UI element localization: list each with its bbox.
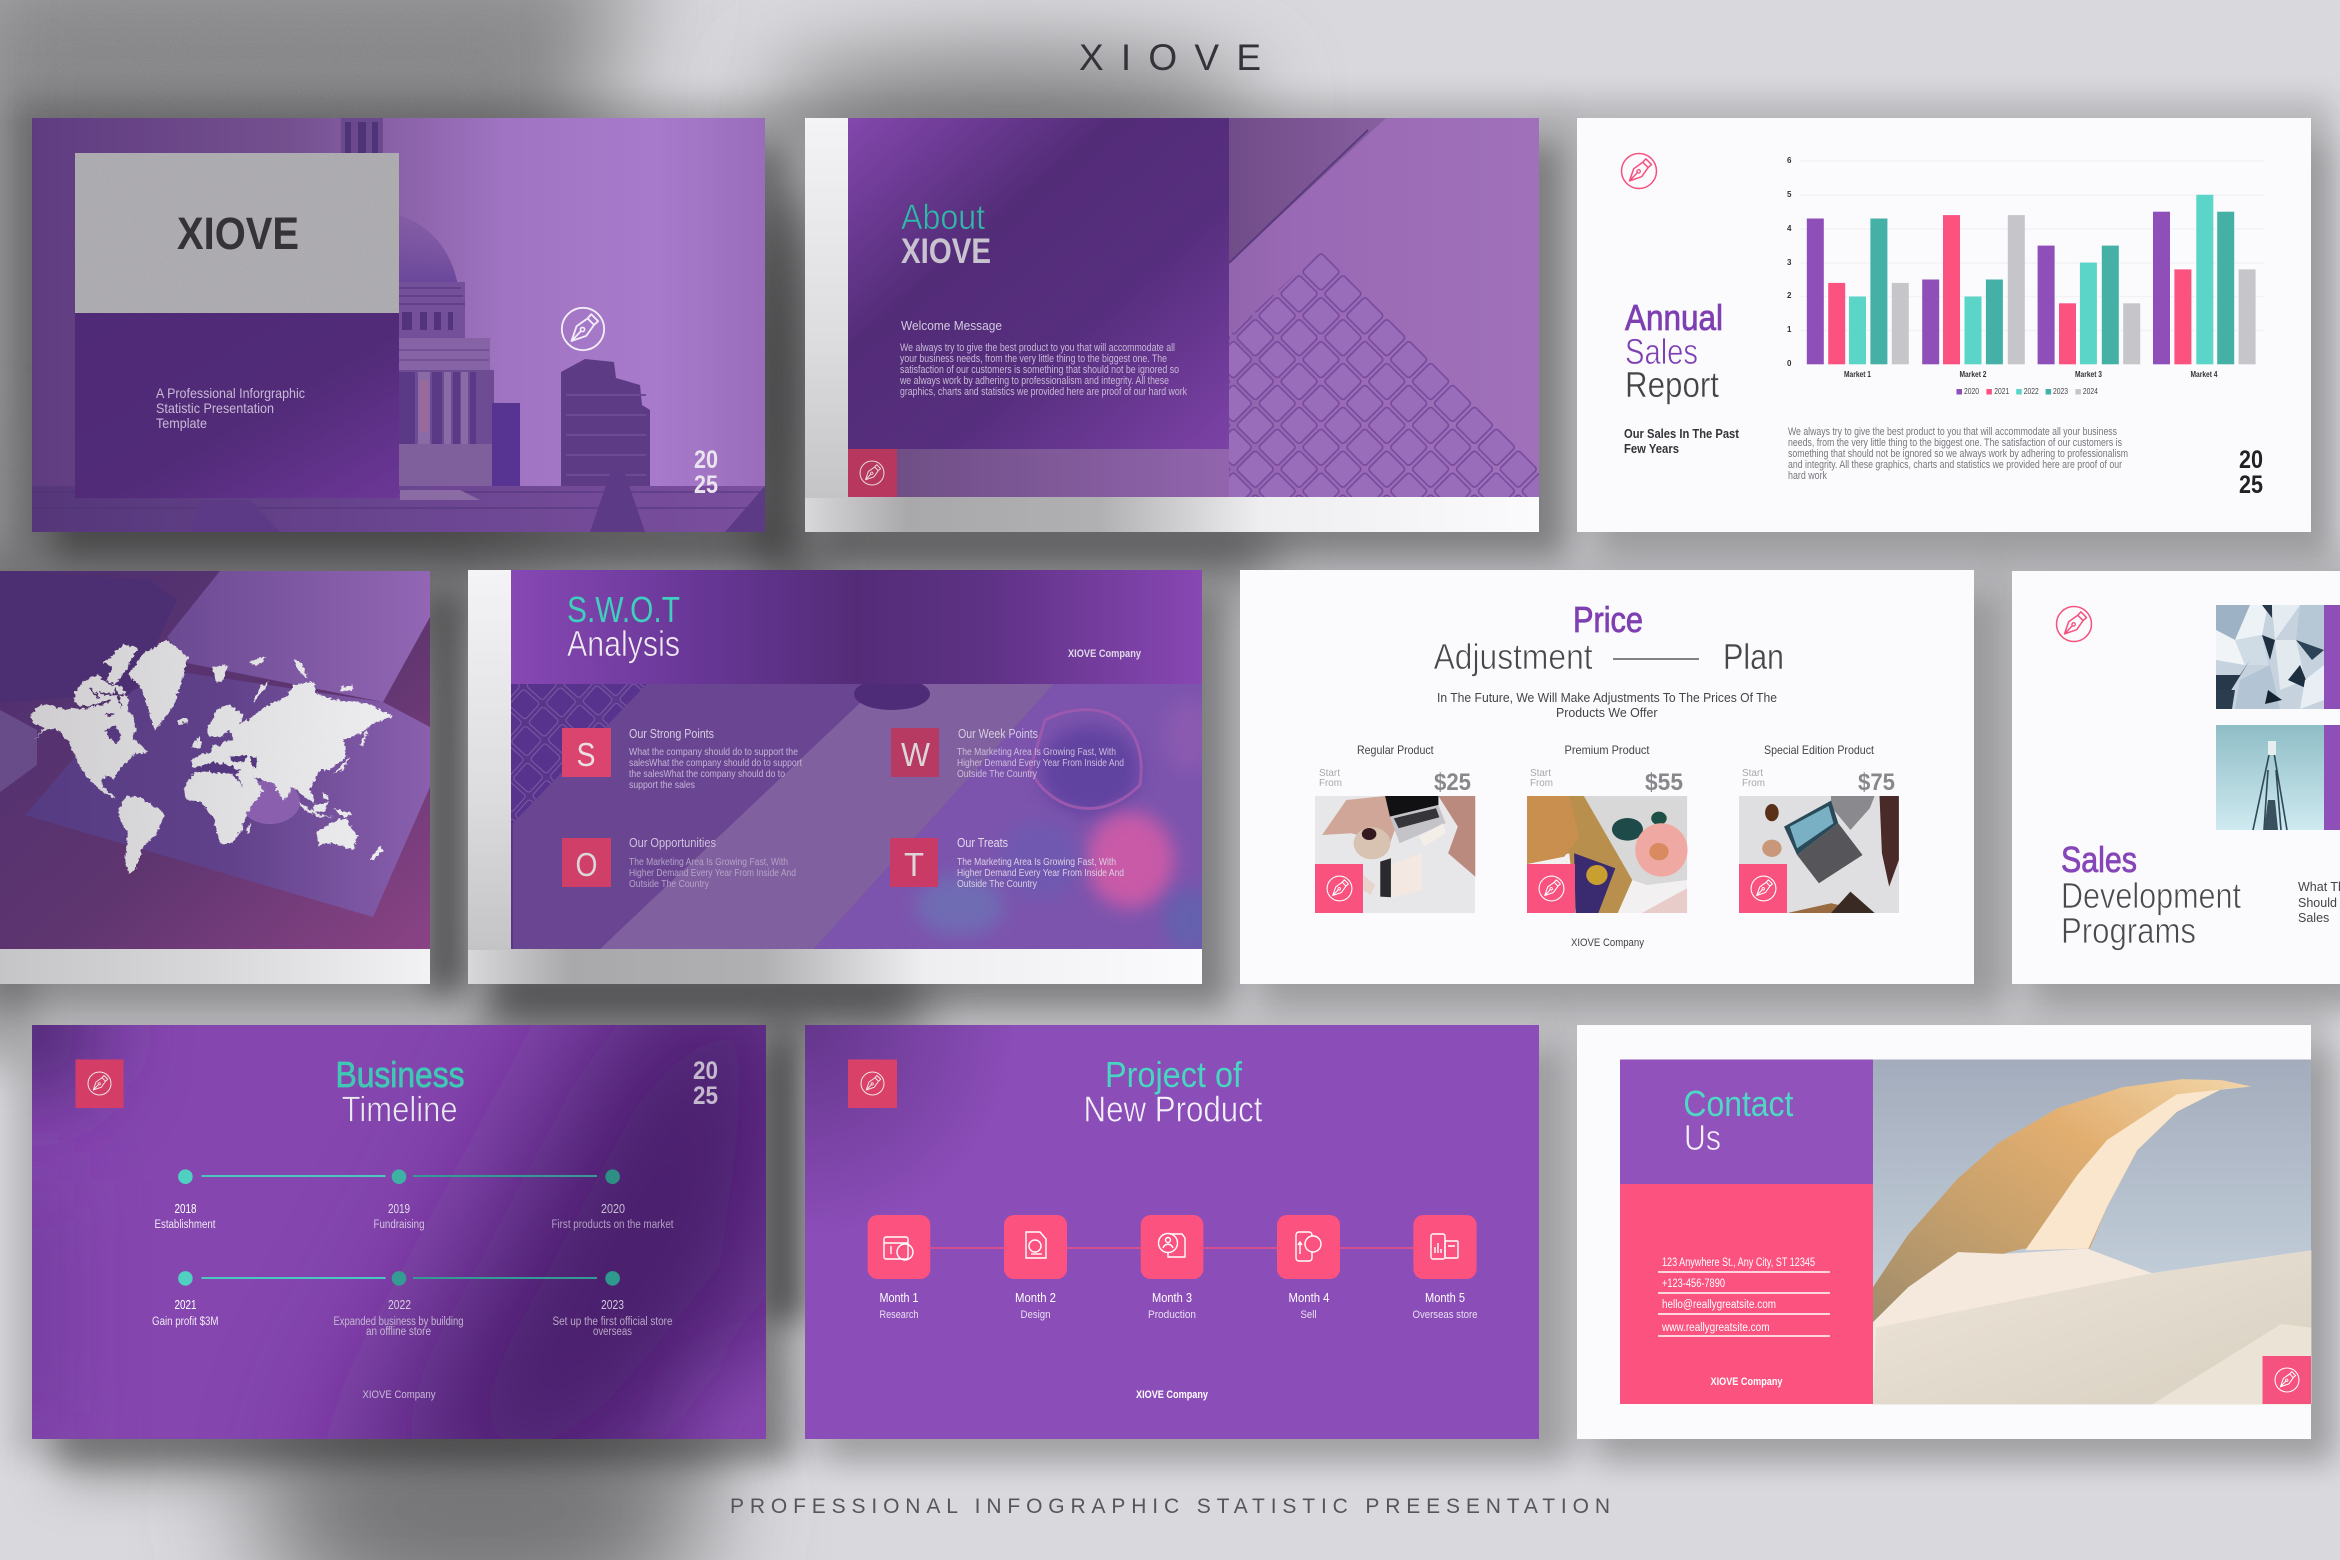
swot item: opportunities: Our Opportunities — [629, 836, 716, 850]
heading — [1625, 297, 1723, 405]
step: month 5: Overseas store — [1412, 1309, 1478, 1321]
heading: Plan — [1723, 636, 1784, 677]
timeline row two: 2022 — [388, 1297, 411, 1312]
body text: something that should not be ignored so we always work by adhering to professionalism — [1788, 448, 2128, 460]
pink contact block: 123 Anywhere St., Any City, ST 12345 — [1662, 1257, 1815, 1269]
subheading: Our Sales In The Past — [1624, 426, 1740, 441]
timeline row two: 2023 — [601, 1297, 624, 1312]
purple subtitle box: Statistic Presentation — [156, 400, 274, 416]
timeline row one: Establishment — [154, 1219, 216, 1231]
year: 20 — [694, 446, 718, 474]
bar chart: 5 — [1787, 190, 1792, 199]
step: month 4: Sell — [1300, 1309, 1316, 1321]
swot item: weaknesses: Our Week Points — [958, 727, 1038, 741]
panel: price plan slide — [1240, 570, 1974, 984]
body text: needs, from the very little thing to the biggest one. The satisfaction of our customers is — [1788, 437, 2122, 449]
pink contact block — [1620, 1184, 1873, 1404]
dark text panel: Welcome Message — [901, 318, 1002, 333]
swot item: threats: The Marketing Area Is Growing Fast, With — [957, 856, 1116, 868]
step: month 5 — [1412, 1215, 1478, 1321]
heading — [1434, 599, 1784, 677]
body text: hard work — [1788, 470, 1827, 482]
panel: cover slide — [32, 118, 765, 532]
pink contact block: hello@reallygreatsite.com — [1662, 1299, 1776, 1311]
timeline row one: 2018 — [174, 1201, 196, 1216]
step: month 4: Month 4 — [1288, 1290, 1330, 1305]
title: XIOVE — [1079, 37, 1261, 78]
timeline row two: 2021 — [174, 1297, 196, 1312]
product: premium — [1527, 743, 1688, 913]
product: special edition — [1739, 743, 1899, 913]
pink contact block: XIOVE Company — [1710, 1376, 1783, 1388]
panel: about slide — [805, 118, 1539, 532]
swot item: threats — [890, 836, 1124, 890]
panel: sales development slide — [2012, 571, 2340, 984]
swot item: strengths: the salesWhat the company should do to — [629, 768, 785, 780]
heading: Development — [2061, 875, 2241, 916]
pink contact block: www.reallygreatsite.com — [1661, 1322, 1770, 1334]
purple tile — [2324, 605, 2340, 709]
product: special edition: From — [1742, 778, 1765, 789]
heading: Project of — [1105, 1054, 1243, 1095]
icon: pink logo tile — [2262, 1356, 2311, 1404]
panel: world map slide — [0, 571, 430, 984]
panel: SWOT slide — [468, 570, 1216, 984]
world map — [32, 640, 393, 874]
heading: Annual — [1625, 297, 1723, 338]
product: premium: $55 — [1645, 769, 1683, 796]
swot item: strengths: support the sales — [629, 779, 695, 791]
year: 25 — [694, 471, 718, 499]
heading — [1084, 1054, 1262, 1130]
icon: pen nib — [562, 308, 604, 350]
product: regular — [1315, 743, 1475, 913]
timeline row two: Gain profit $3M — [152, 1316, 218, 1328]
icon: pen logo — [2057, 607, 2091, 641]
step: month 2: Month 2 — [1015, 1290, 1056, 1305]
step: month 3: Month 3 — [1152, 1290, 1192, 1305]
heading — [2061, 839, 2241, 951]
purple subtitle box: Template — [156, 415, 207, 431]
footer label: XIOVE Company — [362, 1389, 436, 1401]
product: special edition: Start — [1742, 768, 1763, 779]
subheading cut off at edge — [2298, 880, 2340, 925]
timeline row two: Set up the first official store — [552, 1316, 672, 1328]
header band: S.W.O.T — [567, 589, 680, 630]
step: month 2: Design — [1020, 1309, 1050, 1321]
year: 20 — [2239, 446, 2263, 474]
product: regular: From — [1319, 778, 1342, 789]
swot item: strengths: Our Strong Points — [629, 727, 714, 741]
swot item: threats: Outside The Country — [957, 878, 1038, 890]
swot item: weaknesses: Outside The Country — [957, 768, 1038, 780]
timeline row one: Fundraising — [374, 1219, 424, 1231]
swot item: threats: Higher Demand Every Year From Inside And — [957, 867, 1124, 879]
photo: keyboard — [1229, 118, 1539, 497]
heading: Report — [1625, 364, 1719, 405]
dark text panel: XIOVE — [901, 232, 991, 271]
grey title box: XIOVE — [177, 208, 299, 259]
heading: Timeline — [342, 1089, 458, 1130]
swot item: opportunities: Outside The Country — [629, 878, 710, 890]
dark text panel: About — [901, 198, 985, 237]
heading: Sales — [1625, 331, 1698, 372]
step: month 1: Research — [880, 1309, 918, 1321]
year: 25 — [2239, 471, 2263, 499]
swot item: strengths: salesWhat the company should do to support — [629, 757, 802, 769]
bar chart: 1 — [1787, 325, 1792, 334]
swot item: opportunities: Higher Demand Every Year From Inside And — [629, 867, 796, 879]
year — [693, 1057, 718, 1110]
year: 25 — [693, 1082, 718, 1110]
heading: Programs — [2061, 910, 2196, 951]
icon: red logo tile — [76, 1060, 124, 1108]
heading: New Product — [1084, 1089, 1262, 1130]
subheading — [1437, 690, 1777, 720]
year — [2239, 446, 2263, 499]
connector lines — [930, 1247, 1414, 1249]
year — [694, 446, 718, 499]
photo: spire — [2216, 725, 2324, 830]
timeline row two — [152, 1271, 672, 1338]
step: month 3: Production — [1148, 1309, 1196, 1321]
heading — [336, 1054, 464, 1130]
bar chart: Market 1 — [1844, 370, 1871, 379]
legend — [1956, 387, 2098, 396]
header band: XIOVE Company — [1068, 648, 1142, 660]
heading: Adjustment — [1434, 636, 1593, 677]
heading: Business — [336, 1054, 464, 1095]
product: regular: $25 — [1434, 769, 1471, 796]
subheading: Few Years — [1624, 441, 1679, 456]
swot item: weaknesses: Higher Demand Every Year From Inside And — [957, 757, 1124, 769]
bar chart: 3 — [1787, 258, 1792, 267]
grey title box — [75, 153, 399, 313]
dark text panel: We always try to give the best product to you that will accommodate all — [900, 342, 1175, 354]
body text — [1788, 426, 2128, 482]
purple heading block: Contact — [1683, 1083, 1793, 1124]
bar chart — [1787, 156, 2264, 396]
subheading — [1624, 426, 1740, 456]
step: month 5: Month 5 — [1425, 1290, 1465, 1305]
purple subtitle box: A Professional Inforgraphic — [156, 385, 305, 401]
timeline row one: First products on the market — [552, 1219, 674, 1231]
product: regular: Start — [1319, 768, 1340, 779]
step: month 1: Month 1 — [880, 1290, 918, 1305]
bar chart: Market 4 — [2190, 370, 2218, 379]
step: month 2 — [1004, 1215, 1067, 1321]
timeline row two: an offline store — [366, 1326, 431, 1338]
timeline row two: Expanded business by building — [334, 1316, 464, 1328]
subheading: In The Future, We Will Make Adjustments To The Prices Of The — [1437, 690, 1777, 705]
pink contact block: +123-456-7890 — [1662, 1278, 1725, 1290]
legend: 2021 — [1994, 387, 2010, 396]
heading: Price — [1573, 599, 1643, 640]
product: premium: From — [1530, 778, 1553, 789]
timeline row one: 2019 — [388, 1201, 410, 1216]
bar chart: 4 — [1787, 224, 1792, 233]
product: premium: Premium Product — [1564, 743, 1650, 757]
panel: new product project slide — [805, 1025, 1539, 1439]
swot item: weaknesses — [891, 727, 1124, 780]
photo: city skyline with dome — [32, 118, 765, 532]
bar chart: 6 — [1787, 156, 1792, 165]
legend: 2023 — [2053, 387, 2068, 396]
swot item: weaknesses: W — [901, 736, 931, 773]
swot item: threats: Our Treats — [957, 836, 1008, 850]
purple tile — [2324, 725, 2340, 830]
body text: We always try to give the best product to you that will accommodate all your business — [1788, 426, 2117, 438]
product: special edition: Special Edition Product — [1764, 743, 1875, 757]
step: month 3 — [1141, 1215, 1203, 1321]
bar chart: 0 — [1787, 359, 1792, 368]
product: regular: Regular Product — [1357, 743, 1434, 757]
photo: white sail architecture — [1873, 1060, 2311, 1404]
bar chart: Market 3 — [2075, 370, 2102, 379]
swot item: strengths — [562, 727, 802, 791]
heading: Sales — [2061, 839, 2137, 880]
swot item: opportunities — [562, 836, 796, 890]
body text: and integrity. All these graphics, charts and statistics we provided here are proof of our — [1788, 459, 2122, 471]
product: premium: Start — [1530, 768, 1551, 779]
subheading: Products We Offer — [1556, 705, 1658, 720]
icon: red logo tile — [848, 449, 897, 497]
swot item: strengths: What the company should do to support the — [629, 746, 798, 758]
swot item: opportunities: O — [576, 846, 598, 883]
legend: 2024 — [2083, 387, 2098, 396]
legend: 2022 — [2024, 387, 2039, 396]
header band — [511, 570, 1202, 684]
bar chart: 2 — [1787, 291, 1792, 300]
legend: 2020 — [1964, 387, 1979, 396]
dark text panel: we always work by adhering to professionalism and integrity. All these — [899, 375, 1169, 387]
dark text panel: graphics, charts and statistics we provided here are proof of our hard work — [900, 386, 1187, 398]
icon: red logo tile — [848, 1060, 897, 1108]
header band: Analysis — [567, 623, 680, 664]
swot item: opportunities: The Marketing Area Is Growing Fast, With — [629, 856, 788, 868]
dark text panel: satisfaction of our customers is something that should not be ignored so — [900, 364, 1179, 376]
photo: desk sheets — [0, 571, 430, 917]
photo: geometric facade — [2216, 605, 2324, 709]
panel: annual sales report — [1577, 118, 2311, 532]
timeline row one — [154, 1169, 674, 1231]
soft gradient shading — [32, 1025, 766, 1439]
icon: pen logo — [1622, 154, 1656, 188]
dark text panel: your business needs, from the very little thing to the biggest one. The — [900, 353, 1167, 365]
swot item: weaknesses: The Marketing Area Is Growing Fast, With — [957, 746, 1116, 758]
purple heading block — [1620, 1060, 1873, 1184]
panel: contact slide — [1577, 1025, 2311, 1439]
swot item: threats: T — [904, 846, 924, 883]
swot item: strengths: S — [576, 736, 596, 773]
product: special edition: $75 — [1858, 769, 1895, 796]
dark text panel — [848, 118, 1229, 449]
purple subtitle box — [75, 313, 399, 498]
step: month 1 — [868, 1215, 930, 1321]
subheading cut off at edge: Sales — [2298, 911, 2329, 925]
footer label: XIOVE Company — [1136, 1389, 1209, 1401]
year: 20 — [693, 1057, 718, 1085]
photo: desk and marble — [511, 678, 1216, 952]
step: month 4 — [1277, 1215, 1340, 1321]
timeline row one: 2020 — [601, 1201, 625, 1216]
subtitle: PROFESSIONAL INFOGRAPHIC STATISTIC PREESENTATION — [730, 1495, 1610, 1518]
footer label: XIOVE Company — [1571, 937, 1644, 949]
purple heading block: Us — [1684, 1117, 1721, 1158]
panel: business timeline slide — [32, 1025, 766, 1439]
bar chart: Market 2 — [1960, 370, 1987, 379]
timeline row two: overseas — [593, 1326, 632, 1338]
